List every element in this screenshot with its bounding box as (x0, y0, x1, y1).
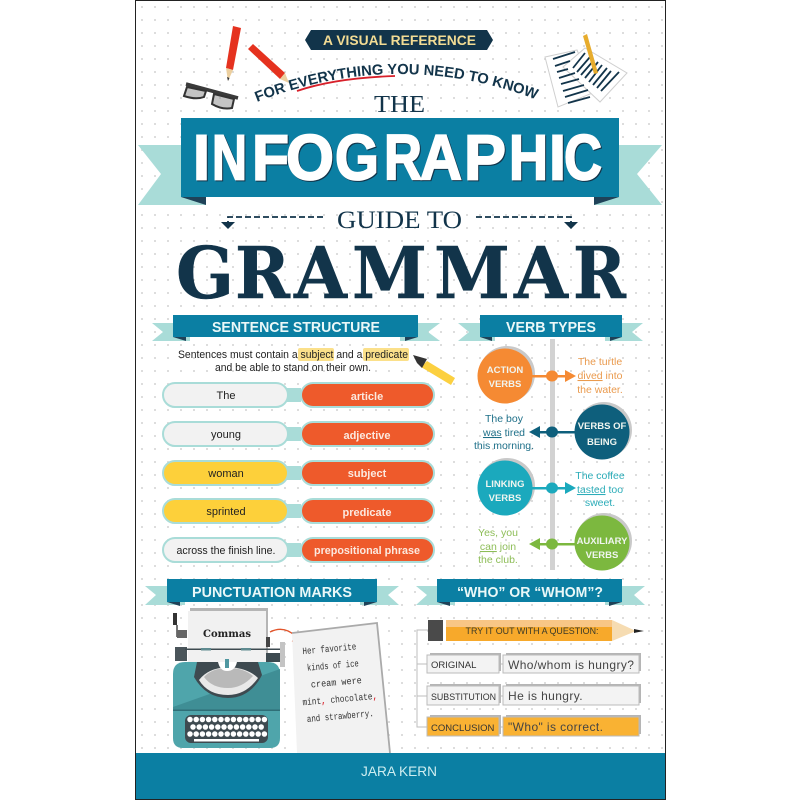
verb: linking: The coffee (575, 470, 625, 482)
verb: being: was tired (482, 427, 525, 439)
verb: auxiliary: the club. (478, 554, 518, 566)
main title ribbon (138, 118, 662, 210)
verb: linking: LINKING (485, 479, 525, 490)
banner: verb types (458, 315, 643, 341)
row: the / article: article (351, 391, 383, 403)
curved subtitle: FOR EVERYTHING YOU NEED TO KNOW (254, 64, 540, 102)
icon: pencil callout (428, 620, 644, 641)
row: conclusion: "Who" is correct. (508, 720, 603, 734)
verb: action: the water. (577, 384, 623, 396)
verb: action: ACTION (487, 365, 523, 376)
heading: grammar: M (352, 231, 427, 315)
verb: action (478, 346, 623, 404)
verb: linking: tasted too (577, 484, 623, 496)
red underline (297, 76, 395, 91)
icon: typewriter (173, 608, 285, 748)
note sheet: cream were (310, 675, 363, 690)
row: original: ORIGINAL (431, 660, 476, 671)
panel: sentence structure (152, 315, 455, 562)
verb: auxiliary: AUXILIARY (577, 536, 628, 547)
heading: grammar: G (176, 231, 234, 315)
badge: a visual reference: A VISUAL REFERENCE (323, 33, 476, 48)
verb: being: this morning. (474, 440, 534, 452)
row: sprinted / predicate: predicate (343, 507, 391, 519)
arrow: paper to note (270, 629, 303, 643)
row: conclusion (427, 715, 641, 736)
row: across the finish line / prepositional phrase (163, 538, 434, 562)
row: substitution: SUBSTITUTION (431, 692, 496, 703)
arrow: dashed right (476, 217, 578, 229)
note sheet: mint, chocolate, (302, 691, 378, 708)
icon: red pencil upright (226, 26, 241, 81)
intro text: and be able to stand on their own. (215, 362, 371, 374)
main title ribbon: N (212, 122, 247, 194)
row: sprinted / predicate: sprinted (206, 506, 246, 518)
row: original (427, 653, 641, 673)
main title ribbon: I (193, 122, 210, 194)
intro text (178, 349, 408, 374)
row: woman / subject: subject (348, 468, 387, 480)
main title ribbon: P (464, 122, 506, 194)
row: young / adjective (163, 422, 434, 446)
typewriter paper label: Commas (203, 628, 251, 640)
heading: grammar: R (573, 231, 627, 315)
banner: punctuation marks: PUNCTUATION MARKS (192, 584, 352, 601)
panel: punctuation marks (145, 579, 399, 753)
verb: action: dived into (578, 370, 623, 382)
heading: the: THE (374, 92, 425, 118)
verb: action: VERBS (489, 379, 521, 390)
verb: action: The turtle (578, 356, 622, 368)
heading: grammar: M (434, 231, 510, 315)
verb: linking (478, 458, 625, 516)
icon: glasses (184, 84, 238, 108)
row: original: Who/whom is hungry? (508, 658, 634, 672)
main title ribbon: R (384, 122, 422, 194)
note sheet: Her favorite (302, 641, 357, 657)
verb: auxiliary: VERBS (586, 550, 618, 561)
main title ribbon: F (252, 122, 289, 194)
arrow: dashed left (221, 217, 323, 229)
badge: a visual reference (305, 30, 493, 50)
row: substitution (427, 684, 641, 705)
verb: linking: VERBS (489, 493, 521, 504)
verb: being: VERBS OF (578, 421, 626, 432)
icon: papers and pencil (545, 34, 627, 107)
note sheet (292, 623, 390, 753)
heading: grammar: R (235, 231, 291, 315)
row: conclusion: CONCLUSION (431, 723, 494, 734)
main title ribbon: A (420, 122, 462, 194)
banner: verb types: VERB TYPES (506, 319, 596, 336)
verb: auxiliary: can join (480, 541, 516, 553)
main title ribbon: O (286, 122, 334, 194)
banner: sentence structure: SENTENCE STRUCTURE (212, 319, 380, 336)
heading: guide to: GUIDE TO (337, 207, 462, 234)
row: across the finish line / prepositional phrase: prepositional phrase (314, 545, 420, 557)
main title ribbon: G (335, 122, 379, 194)
row: substitution: He is hungry. (508, 689, 583, 703)
footer band: JARA KERN (361, 763, 437, 779)
row: the / article: The (217, 390, 235, 402)
main title ribbon: C (564, 122, 602, 194)
banner: punctuation marks (145, 579, 399, 606)
highlight: predicate (363, 348, 409, 361)
row: woman / subject (163, 461, 434, 485)
connector tree (417, 630, 503, 727)
heading: grammar: A (293, 231, 348, 315)
verb: being: The boy (485, 413, 524, 425)
banner: sentence structure (152, 315, 440, 341)
row: the / article (163, 383, 434, 407)
icon: pencil callout: TRY IT OUT WITH A QUESTION: (466, 626, 598, 637)
panel: who or whom (416, 579, 645, 736)
intro text: Sentences must contain a subject and a predicate (178, 349, 408, 361)
heading: grammar (176, 231, 627, 315)
highlight: subject (298, 348, 334, 361)
main title ribbon: H (509, 122, 548, 194)
banner: who or whom (416, 579, 645, 606)
row: young / adjective: adjective (343, 430, 391, 442)
icon: red pencil diagonal (248, 44, 289, 83)
verb: auxiliary: Yes, you (478, 527, 518, 539)
row: across the finish line / prepositional phrase: across the finish line. (176, 545, 276, 557)
timeline spine (550, 339, 555, 570)
verb: auxiliary (478, 513, 632, 570)
note sheet: and strawberry. (306, 708, 374, 725)
icon: highlighter (413, 355, 455, 385)
verb: being: BEING (587, 437, 617, 448)
banner: who or whom: “WHO” OR “WHOM”? (457, 584, 603, 601)
row: sprinted / predicate (163, 499, 434, 523)
row: woman / subject: woman (207, 468, 244, 480)
heading: grammar: A (513, 231, 569, 315)
main title ribbon: I (549, 122, 566, 194)
row: young / adjective: young (211, 429, 241, 441)
verb: being (474, 402, 632, 460)
note sheet: kinds of ice (307, 658, 359, 674)
book cover background (136, 0, 666, 800)
footer band (136, 753, 665, 799)
panel: verb types (458, 315, 643, 570)
verb: linking: sweet. (585, 497, 615, 509)
